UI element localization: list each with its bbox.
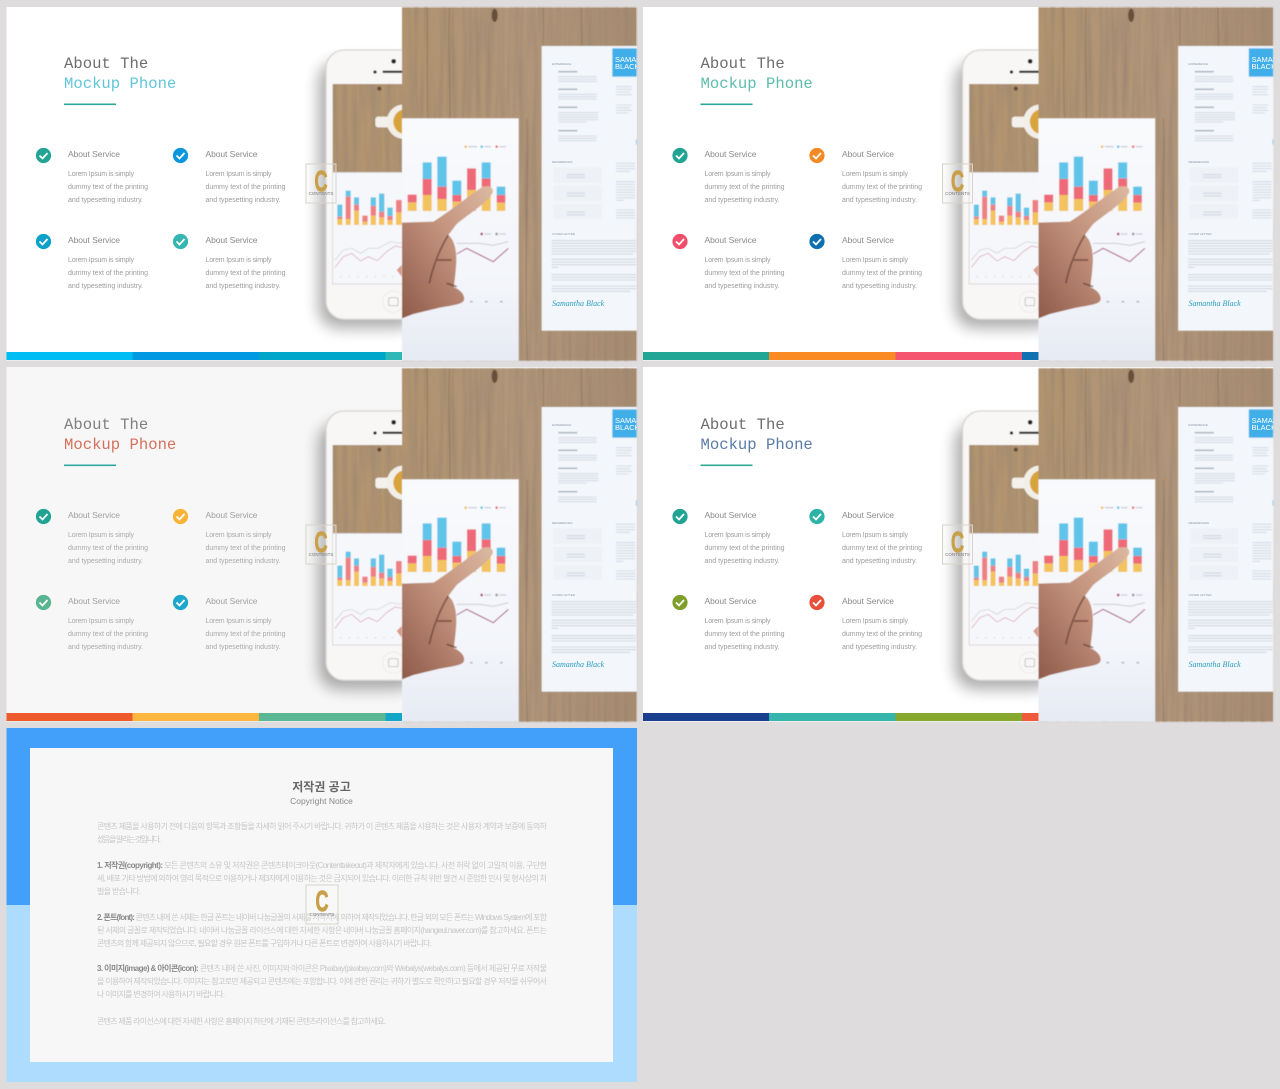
- heading: About The: [64, 55, 148, 73]
- service item 4: dummy text of the printing: [206, 631, 286, 638]
- section 1: copyright: 벌을 받습니다.: [97, 886, 141, 896]
- panel: slide 3: [6, 367, 642, 722]
- service item 1: dummy text of the printing: [68, 545, 148, 552]
- service item 1: and typesetting industry.: [68, 197, 143, 204]
- service item 2: [809, 509, 922, 565]
- service item 1: About Service: [68, 510, 120, 520]
- service item 1: [672, 509, 785, 565]
- service item 1: Lorem Ipsum is simply: [704, 532, 771, 539]
- service item 1: Lorem Ipsum is simply: [68, 532, 134, 539]
- section 1: copyright: [97, 860, 547, 896]
- section 2: fonts: 된 서체의 글꼴로 제작되었습니다. 네이버 나눔글꼴 라이선스에 대한 자세한 사항은 네이버 나눔글꼴 홈페이지(hangeul.naver.com)를 참고하세요. 폰트는: [97, 925, 547, 935]
- resume labels: REFERENCES: [552, 521, 573, 525]
- service item 2: About Service: [842, 510, 894, 520]
- service item 2: [173, 148, 286, 204]
- heading: About The: [700, 416, 785, 434]
- heading: About The: [700, 55, 785, 73]
- resume labels: Samantha Black: [552, 299, 605, 308]
- heading: Mockup Phone: [700, 75, 813, 93]
- panel: slide 4: [643, 367, 1278, 722]
- service item 1: dummy text of the printing: [704, 545, 785, 552]
- service item 2: and typesetting industry.: [842, 558, 917, 565]
- watermark logo: C: [314, 527, 328, 559]
- resume labels: [552, 55, 642, 308]
- service item 2: and typesetting industry.: [206, 558, 281, 565]
- resume labels: SAMAN: [615, 416, 642, 425]
- service item 3: Lorem Ipsum is simply: [68, 618, 134, 625]
- service item 3: About Service: [68, 235, 120, 245]
- heading: [700, 416, 813, 466]
- service item 1: and typesetting industry.: [68, 558, 143, 565]
- intro paragraph: 셨음을 알리는 것입니다.: [97, 834, 161, 844]
- service item 3: and typesetting industry.: [68, 283, 143, 290]
- service item 4: About Service: [206, 596, 258, 606]
- section 2: fonts: [97, 912, 548, 948]
- service item 4: [173, 595, 286, 651]
- footer colour bar: [643, 713, 1038, 721]
- service item 1: dummy text of the printing: [68, 184, 148, 191]
- resume labels: EXPERIENCE: [1188, 423, 1208, 427]
- section 2: fonts: 2. 폰트(font): 콘텐츠 내에 쓴 서체는 한글 폰트는 네이버 나눔글꼴의 서체를 저작자에 의하여 제작되었습니다. 한글 외의 모든 폰트는 Windows System에 포함: [97, 912, 548, 922]
- service item 3: dummy text of the printing: [68, 631, 148, 638]
- service item 3: and typesetting industry.: [704, 283, 780, 290]
- section 3: images and icons: [97, 963, 547, 999]
- heading: Mockup Phone: [64, 436, 176, 454]
- heading: About The: [64, 416, 148, 434]
- closing line: 콘텐츠 제품 라이선스에 대한 자세한 사항은 홈페이지 하단에 기재된 콘텐츠라이선스를 참고하세요.: [97, 1016, 386, 1026]
- service item 4: dummy text of the printing: [842, 270, 922, 277]
- service item 4: dummy text of the printing: [206, 270, 286, 277]
- service item 3: dummy text of the printing: [704, 631, 785, 638]
- service item 3: Lorem Ipsum is simply: [704, 618, 771, 625]
- watermark logo: [942, 164, 972, 203]
- intro paragraph: 콘텐츠 제품을 사용하기 전에 다음의 항목과 조항들을 자세히 읽어 주시기 바랍니다. 귀하가 이 콘텐츠 제품을 사용하는 것은 사용자 계약과 보증에 동의하: [97, 821, 548, 831]
- resume labels: REFERENCES: [552, 160, 573, 164]
- phone and desk photo: [318, 368, 637, 722]
- heading: [64, 55, 176, 105]
- resume labels: [1188, 416, 1278, 669]
- resume labels: SAMAN: [615, 55, 642, 64]
- service item 4: About Service: [842, 596, 894, 606]
- service item 2: Lorem Ipsum is simply: [842, 171, 908, 178]
- notice title: [290, 779, 353, 806]
- service item 1: About Service: [704, 149, 757, 159]
- watermark logo: C: [951, 527, 964, 559]
- resume labels: EXPERIENCE: [1188, 62, 1208, 66]
- resume labels: COVER LETTER: [1188, 232, 1212, 236]
- service item 2: About Service: [206, 510, 258, 520]
- resume labels: COVER LETTER: [552, 232, 576, 236]
- resume labels: BLACK: [615, 62, 640, 71]
- service item 2: Lorem Ipsum is simply: [206, 171, 272, 178]
- service item 3: [672, 595, 785, 651]
- service item 4: and typesetting industry.: [842, 283, 917, 290]
- panel: slide 1: [6, 7, 642, 361]
- service item 2: Lorem Ipsum is simply: [842, 532, 908, 539]
- watermark logo: CONTENTS: [310, 912, 334, 917]
- service item 4: Lorem Ipsum is simply: [842, 618, 908, 625]
- watermark logo: [306, 164, 336, 203]
- watermark logo: C: [314, 166, 328, 198]
- service item 4: About Service: [842, 235, 894, 245]
- resume labels: REFERENCES: [1188, 521, 1209, 525]
- watermark logo: CONTENTS: [945, 191, 970, 196]
- resume labels: BLACK: [615, 423, 640, 432]
- service item 4: dummy text of the printing: [842, 631, 922, 638]
- service item 1: dummy text of the printing: [704, 184, 785, 191]
- service item 1: [36, 509, 148, 565]
- service item 3: About Service: [68, 596, 120, 606]
- resume labels: Samantha Black: [552, 660, 605, 669]
- service item 3: About Service: [704, 596, 757, 606]
- service item 1: and typesetting industry.: [704, 197, 780, 204]
- resume labels: REFERENCES: [1188, 160, 1209, 164]
- service item 3: Lorem Ipsum is simply: [68, 257, 134, 264]
- watermark logo: [942, 525, 972, 564]
- service item 3: dummy text of the printing: [68, 270, 148, 277]
- service item 1: About Service: [704, 510, 757, 520]
- resume labels: SAMAN: [1252, 55, 1278, 64]
- phone and desk photo: [318, 7, 637, 361]
- service item 1: About Service: [68, 149, 120, 159]
- service item 4: [809, 234, 922, 290]
- heading: Mockup Phone: [64, 75, 176, 93]
- service item 3: and typesetting industry.: [704, 644, 780, 651]
- service item 2: dummy text of the printing: [842, 545, 922, 552]
- resume labels: EXPERIENCE: [552, 62, 571, 66]
- panel: slide 2: [643, 7, 1278, 361]
- section 1: copyright: 세, 배포 기타 방법에 의하여 영리 목적으로 이용하거나 제3자에게 이용하는 것은 금지되어 있습니다. 이러한 규칙 위반 발견 시 준엄한 민사 및 형사상의 처: [97, 873, 547, 883]
- service item 4: Lorem Ipsum is simply: [206, 257, 272, 264]
- footer colour bar: [6, 713, 402, 721]
- service item 4: About Service: [206, 235, 258, 245]
- service item 4: Lorem Ipsum is simply: [842, 257, 908, 264]
- service item 2: [809, 148, 922, 204]
- service item 4: and typesetting industry.: [206, 283, 281, 290]
- service item 4: [809, 595, 922, 651]
- service item 4: [173, 234, 286, 290]
- section 3: images and icons: 3. 이미지(image) & 아이콘(icon): 콘텐츠 내에 쓴 사진, 이미지와 아이콘은 Pixabay(pixabay.com)와 Webalys(webalys.com) 등에서 제공된 무료 저작물: [97, 963, 547, 973]
- service item 2: and typesetting industry.: [206, 197, 281, 204]
- watermark logo: C: [316, 886, 329, 918]
- resume labels: BLACK: [1252, 423, 1276, 432]
- service item 2: About Service: [842, 149, 894, 159]
- service item 4: Lorem Ipsum is simply: [206, 618, 272, 625]
- service item 3: [36, 595, 148, 651]
- watermark logo: [306, 525, 336, 564]
- service item 1: Lorem Ipsum is simply: [704, 171, 771, 178]
- resume labels: COVER LETTER: [552, 593, 576, 597]
- service item 2: dummy text of the printing: [842, 184, 922, 191]
- heading: Mockup Phone: [700, 436, 813, 454]
- watermark logo: C: [951, 166, 964, 198]
- service item 2: and typesetting industry.: [842, 197, 917, 204]
- footer colour bar: [6, 352, 402, 360]
- watermark logo: [306, 885, 338, 924]
- section 1: copyright: 1. 저작권(copyright): 모든 콘텐츠의 소유 및 저작권은 콘텐츠테이크아웃(Contenttakeout)과 제작자에게 있습니다. 사전 허락 없이 고일적 이용, 구단현: [97, 860, 547, 870]
- phone and desk photo: [955, 7, 1273, 361]
- watermark logo: CONTENTS: [945, 552, 970, 557]
- phone and desk photo: [955, 368, 1273, 722]
- service item 3: Lorem Ipsum is simply: [704, 257, 771, 264]
- service item 3: [36, 234, 148, 290]
- notice title: Copyright Notice: [290, 796, 353, 806]
- service item 2: dummy text of the printing: [206, 184, 286, 191]
- service item 1: [36, 148, 148, 204]
- service item 1: and typesetting industry.: [704, 558, 780, 565]
- resume labels: [1188, 55, 1278, 308]
- heading: [700, 55, 813, 105]
- service item 3: [672, 234, 785, 290]
- resume labels: SAMAN: [1252, 416, 1278, 425]
- service item 3: and typesetting industry.: [68, 644, 143, 651]
- service item 1: [672, 148, 785, 204]
- footer colour bar: [643, 352, 1038, 360]
- service item 2: Lorem Ipsum is simply: [206, 532, 272, 539]
- service item 2: dummy text of the printing: [206, 545, 286, 552]
- section 3: images and icons: 을 이용하여 제작되었습니다. 이미지는 참고로만 제공되고 콘텐츠에는 포함합니다. 이에 관한 권리는 귀하가 별도로 확인하고 필요할 경우 저작물 쉬무어서: [97, 976, 547, 986]
- service item 3: About Service: [704, 235, 757, 245]
- resume labels: COVER LETTER: [1188, 593, 1212, 597]
- notice title: 저작권 공고: [292, 779, 351, 794]
- intro paragraph: [97, 821, 548, 844]
- service item 2: [173, 509, 286, 565]
- resume labels: BLACK: [1252, 62, 1276, 71]
- service item 4: and typesetting industry.: [206, 644, 281, 651]
- resume labels: Samantha Black: [1188, 299, 1241, 308]
- panel: copyright notice: [6, 728, 637, 1082]
- service item 4: and typesetting industry.: [842, 644, 917, 651]
- service item 3: dummy text of the printing: [704, 270, 785, 277]
- watermark logo: CONTENTS: [309, 191, 333, 196]
- resume labels: [552, 416, 642, 669]
- service item 1: Lorem Ipsum is simply: [68, 171, 134, 178]
- resume labels: Samantha Black: [1188, 660, 1241, 669]
- resume labels: EXPERIENCE: [552, 423, 571, 427]
- watermark logo: CONTENTS: [309, 552, 333, 557]
- section 2: fonts: 콘텐츠의 함께 제공되지 않으므로, 필요할 경우 원본 폰트를 구입하거나 다른 폰트로 변경하여 사용하시기 바랍니다.: [97, 938, 432, 948]
- section 3: images and icons: 나 이미지를 변경하여 사용하시기 바랍니다.: [97, 989, 225, 999]
- heading: [64, 416, 176, 466]
- service item 2: About Service: [206, 149, 258, 159]
